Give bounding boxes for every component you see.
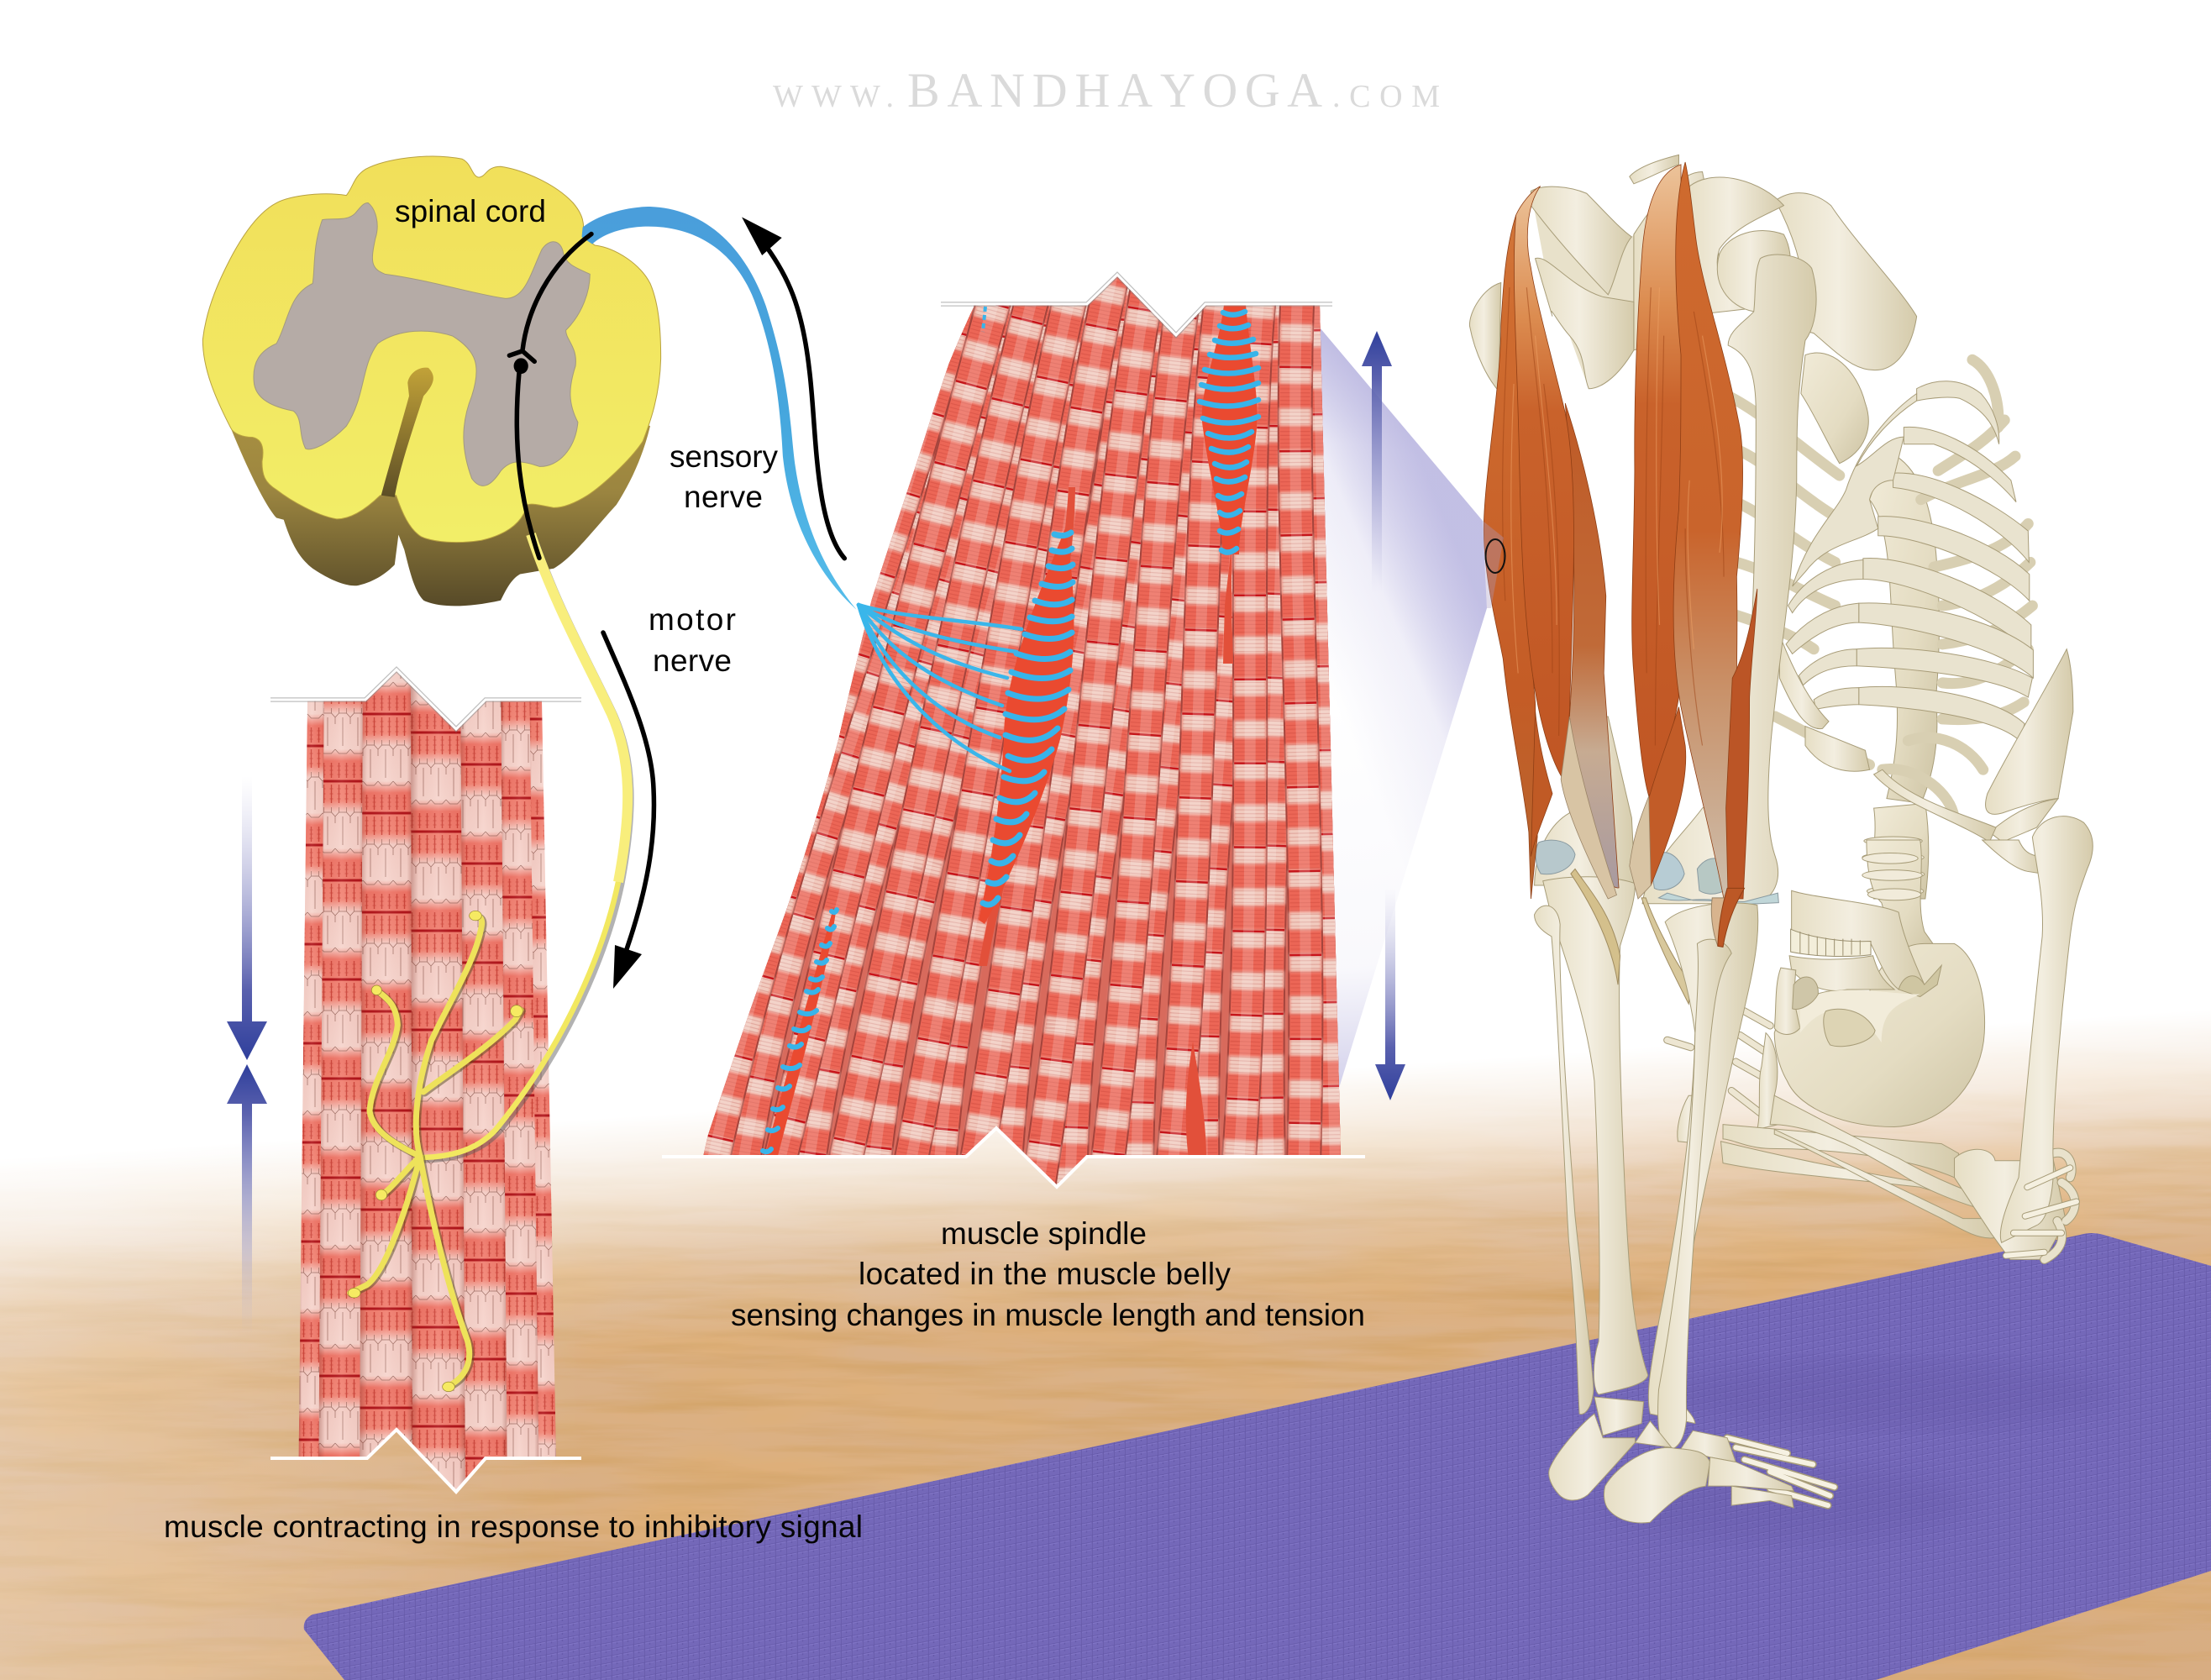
hamstring muscles left thigh xyxy=(1484,186,1619,899)
grey matter xyxy=(254,203,590,486)
right hand and arm xyxy=(1955,816,2093,1259)
scapula and clavicle xyxy=(1874,649,2073,842)
left lower leg xyxy=(1535,840,1648,1415)
website title xyxy=(773,63,1440,118)
labels: sensory nerve: sensory xyxy=(670,439,778,474)
magnification wedge xyxy=(1320,328,1487,1088)
labels: motor nerve: nerve xyxy=(653,643,732,678)
skeleton in forward fold xyxy=(1469,155,2093,1523)
cervical vertebrae xyxy=(1867,840,1933,961)
deep red fibers xyxy=(979,487,1233,1159)
pelvis xyxy=(1469,155,1917,391)
website title: .COM xyxy=(1332,79,1440,114)
labels: sensory nerve: nerve xyxy=(684,480,763,514)
femur left lower xyxy=(1535,717,1635,885)
website title: BANDHA xyxy=(907,63,1153,118)
vertebrae detail xyxy=(1862,837,1925,896)
hamstring muscles right thigh xyxy=(1632,162,1757,899)
labels: motor nerve: motor xyxy=(649,602,736,637)
website title: WWW. xyxy=(773,79,894,114)
caption: muscle spindle: sensing changes in muscle length and tension xyxy=(731,1298,1365,1332)
lower rib cartilage xyxy=(1779,634,1870,771)
spindle location marker xyxy=(1485,539,1505,573)
muscle fibers xyxy=(697,269,1352,1193)
labels: sensory nerve xyxy=(670,439,778,514)
sensory nerve branches xyxy=(859,605,1021,771)
muscle fiber columns xyxy=(298,664,558,1504)
biceps femoris tendon to fibula head xyxy=(1711,888,1745,947)
cord side wall xyxy=(231,351,650,606)
spindle 2 xyxy=(1202,305,1258,554)
left hand and forearm xyxy=(1667,1011,2006,1238)
labels: motor nerve xyxy=(649,602,736,678)
panel: spinal cord cross-section xyxy=(202,156,661,606)
front ribs xyxy=(1786,381,2033,741)
spine upper xyxy=(1801,353,1939,899)
website title: YOGA xyxy=(1160,63,1322,118)
right lower leg xyxy=(1641,853,1778,1450)
cord top face xyxy=(202,156,661,543)
neuron line inside spinal cord with synapse xyxy=(509,234,591,558)
spindle 3 xyxy=(764,908,836,1159)
motor nerve (yellow) xyxy=(418,534,630,1159)
right foot xyxy=(1604,1421,1835,1523)
wedge overlay on thigh xyxy=(1483,521,1504,608)
spindle 1 xyxy=(979,528,1074,924)
rear ribs xyxy=(1728,360,2032,813)
tendons at knee xyxy=(1561,717,1651,899)
sensory nerve direction arrow xyxy=(742,217,844,559)
motor nerve direction arrow xyxy=(603,633,654,989)
left arrows: muscle contraction xyxy=(227,776,267,1336)
sensory nerve (blue) xyxy=(581,207,857,610)
femur right xyxy=(1642,255,1816,904)
muscle fibre texture xyxy=(1503,287,1724,746)
caption: muscle spindle xyxy=(731,1216,1365,1332)
lower body bones, skull and arms xyxy=(1535,816,2093,1523)
caption: muscle contracting: muscle contracting in response to inhibitory signal xyxy=(164,1509,863,1544)
wood floor background xyxy=(0,966,2211,1680)
arrows: muscle stretch xyxy=(1362,331,1405,1100)
panel: stretched muscle with spindles xyxy=(662,269,1365,1193)
panel frame lines xyxy=(270,669,581,1492)
label: spinal cord: spinal cord xyxy=(395,194,546,228)
caption: muscle spindle: muscle spindle xyxy=(941,1216,1147,1251)
skull xyxy=(1774,890,1985,1127)
panel: contracted muscle fibers xyxy=(270,664,581,1504)
motor nerve branches and end plates xyxy=(348,911,523,1392)
left foot xyxy=(1549,1397,1644,1500)
hamstring muscles xyxy=(1484,162,1757,899)
yoga mat xyxy=(304,1233,2211,1680)
central canal xyxy=(381,368,433,497)
upper body bones xyxy=(1469,155,2073,904)
panel frame lines xyxy=(662,275,1365,1187)
caption: muscle spindle: located in the muscle belly xyxy=(859,1257,1232,1291)
